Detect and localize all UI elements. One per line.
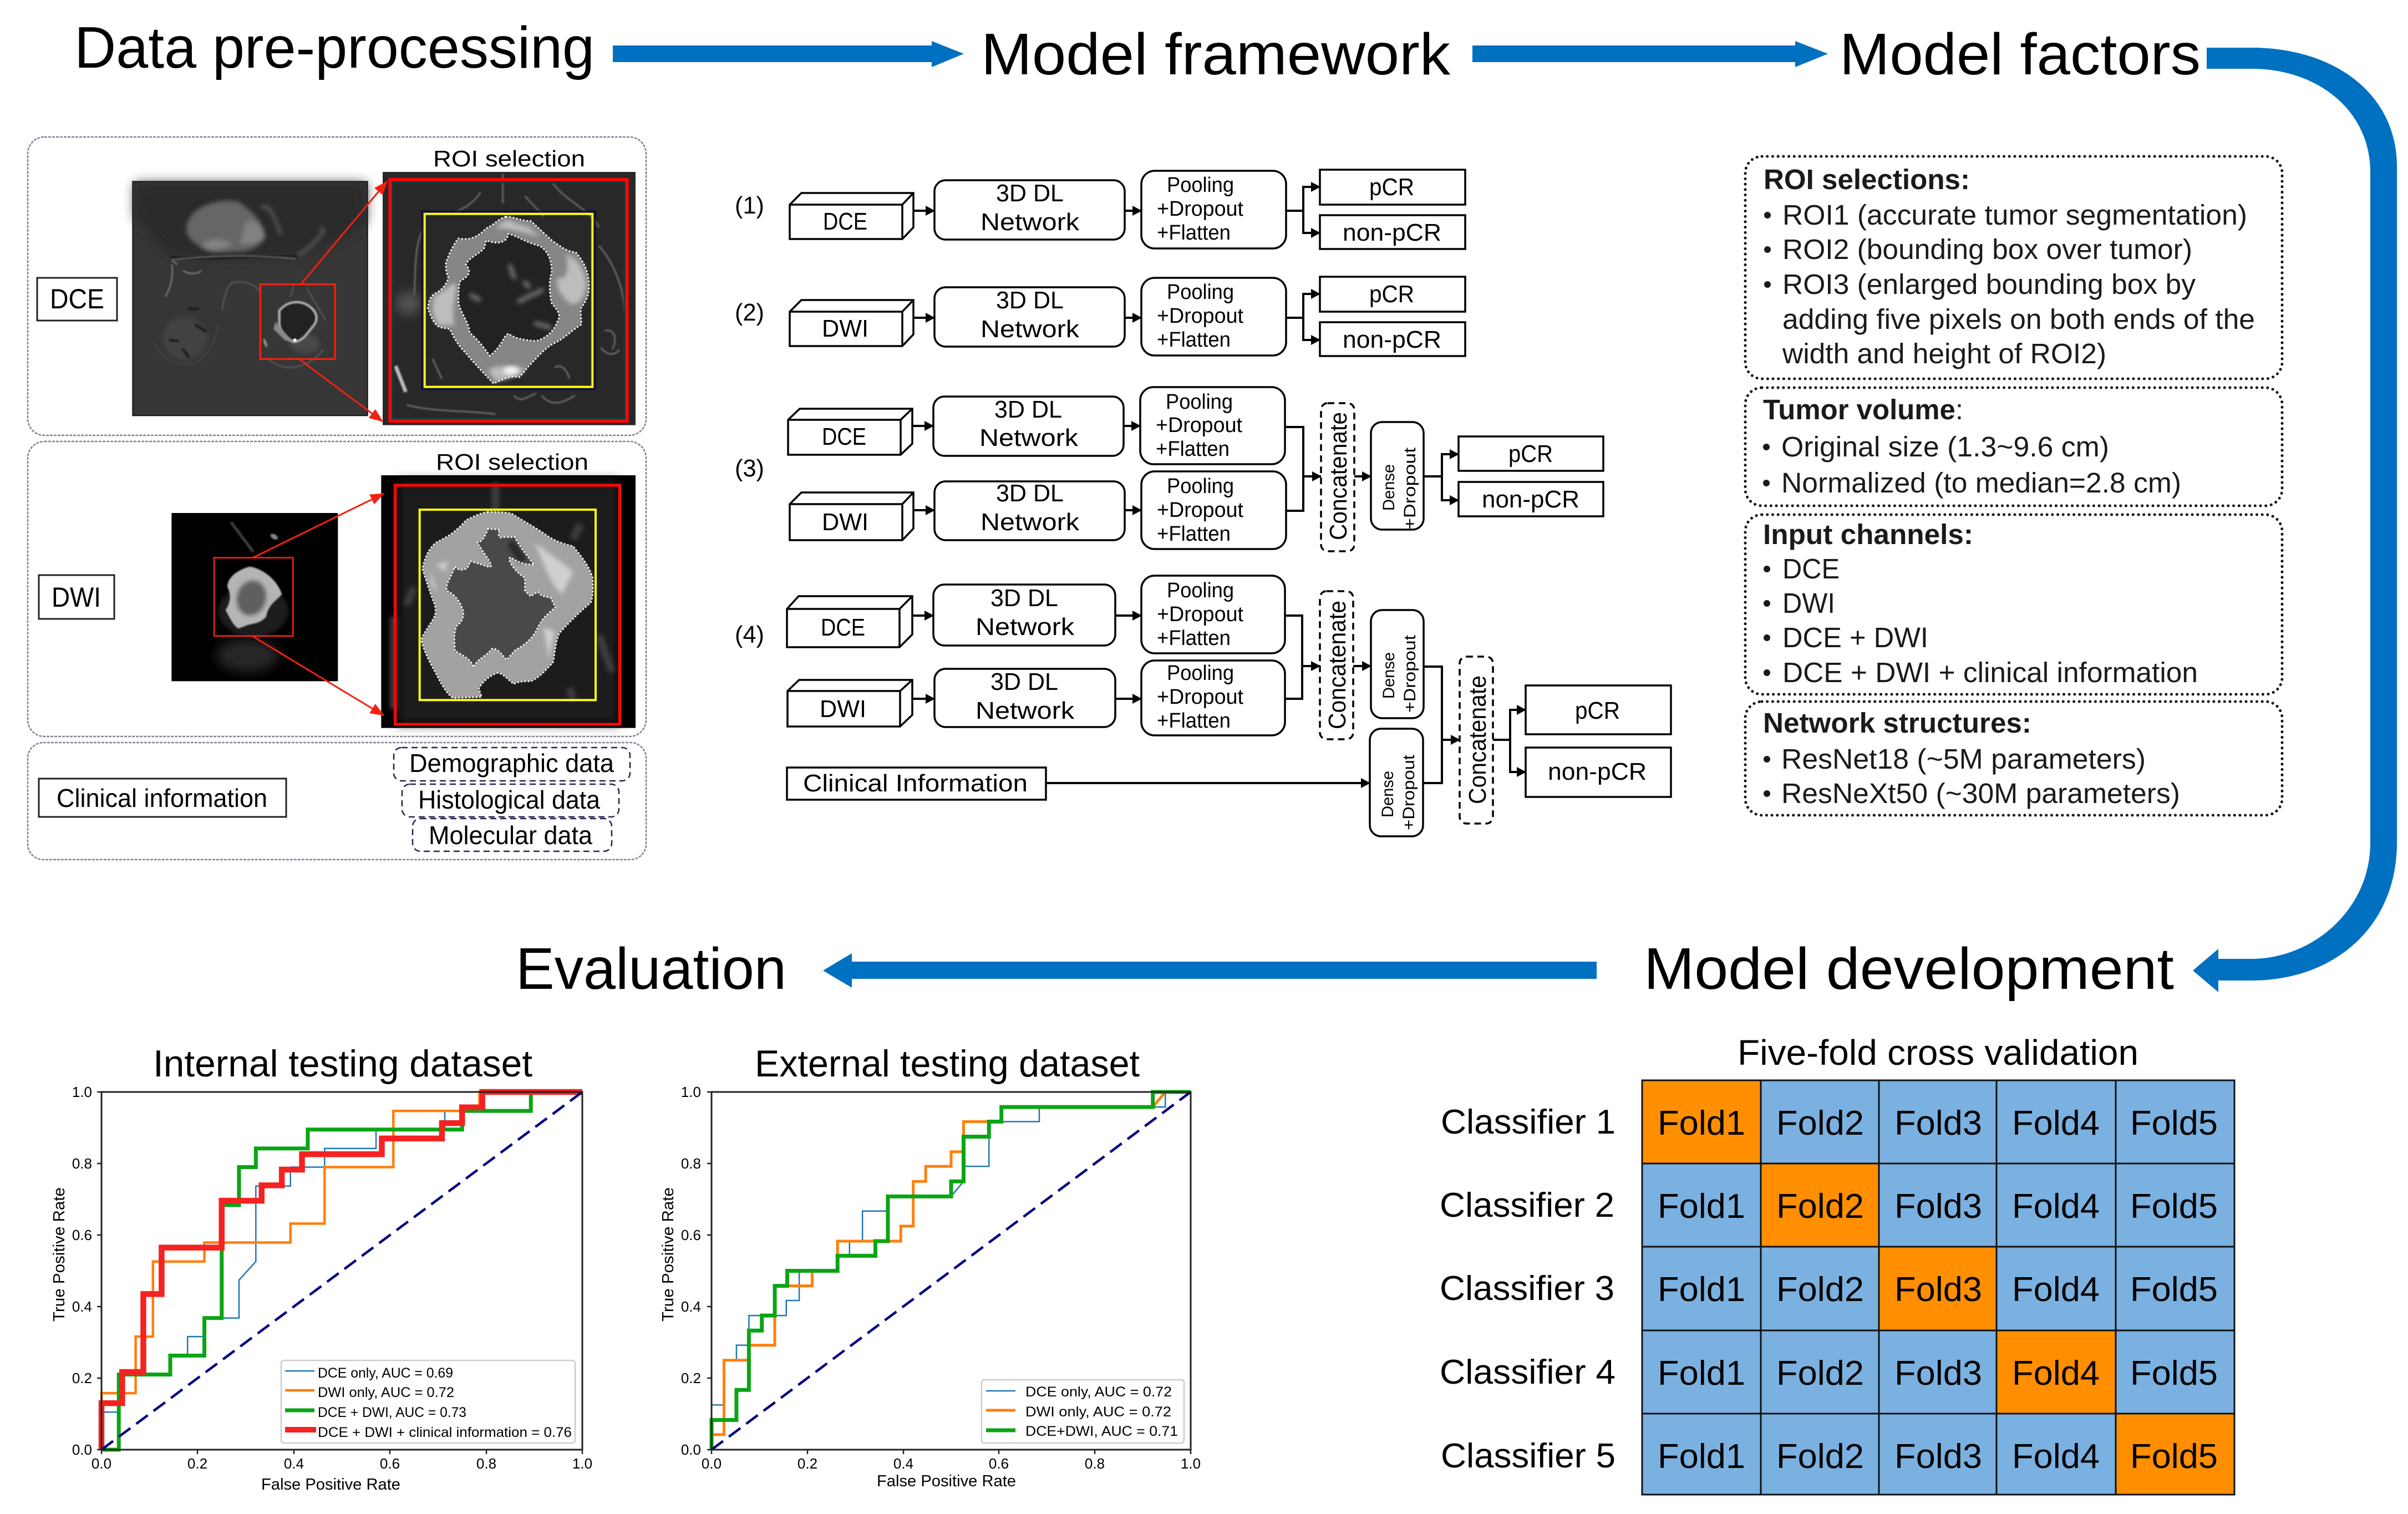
panel: network structures xyxy=(1745,702,2282,815)
external axes: 0.6 xyxy=(989,1455,1009,1472)
DWI label xyxy=(39,575,114,619)
framework row 3: +Dropout xyxy=(1156,414,1242,437)
external curves xyxy=(712,1092,1191,1450)
panel: input channels: DCE xyxy=(1782,553,1840,585)
internal axes: 0.2 xyxy=(72,1370,92,1386)
classifier 1 row xyxy=(1441,1080,2234,1164)
classifier 4 row: Fold3 xyxy=(1894,1354,1982,1393)
DWI enlarged ROI image xyxy=(381,475,636,728)
external axes: 0.4 xyxy=(681,1298,701,1315)
framework row 3: DWI xyxy=(822,509,868,536)
classifier 3 row: Fold4 xyxy=(2012,1271,2100,1309)
title: Model framework: Model framework xyxy=(981,22,1451,87)
framework row 4: 3D DL xyxy=(990,668,1058,695)
classifier 4 row: Fold2 xyxy=(1776,1354,1864,1393)
framework row 3 xyxy=(735,387,1603,551)
panel: input channels: DCE + DWI + clinical information xyxy=(1782,657,2198,688)
molecular data tag: Molecular data xyxy=(429,821,592,850)
external axes xyxy=(659,1084,1201,1490)
classifier 5 row: Fold2 xyxy=(1776,1437,1864,1476)
internal legend: DCE + DWI + clinical information = 0.76 xyxy=(318,1425,572,1440)
panel: tumor volume: Tumor volume: xyxy=(1763,394,1963,425)
framework row 2: (2) xyxy=(735,299,764,326)
framework row 1: Network xyxy=(981,209,1080,236)
panel: network structures: Network structures: xyxy=(1763,707,2031,739)
panel: ROI selections: ROI3 (enlarged bounding box by xyxy=(1782,268,2196,300)
classifier 3 row: Fold2 xyxy=(1776,1271,1864,1309)
panel: input channels: DCE + DWI xyxy=(1782,622,1928,653)
framework row 2: 3D DL xyxy=(996,287,1064,314)
panel: input channels: Input channels: xyxy=(1763,519,1973,550)
classifier 1 row: Classifier 1 xyxy=(1441,1103,1616,1141)
framework row 4: +Flatten xyxy=(1157,627,1231,650)
title: Model development: Model development xyxy=(1644,936,2174,1002)
classifier 5 row: Fold5 xyxy=(2130,1437,2218,1476)
framework row 4: pCR xyxy=(1575,697,1620,724)
panel: input channels: DWI xyxy=(1782,587,1835,619)
framework row 4: Pooling xyxy=(1167,662,1234,685)
framework row 4: non-pCR xyxy=(1548,758,1647,785)
classifier 3 row: Classifier 3 xyxy=(1440,1269,1614,1308)
classifier 2 row: Fold1 xyxy=(1658,1187,1745,1226)
DWI ROI selection heading: ROI selection xyxy=(436,449,588,475)
title: Data pre-processing: Data pre-processing xyxy=(74,15,595,80)
arrow: framework to factors xyxy=(1472,41,1828,67)
panel: ROI selections xyxy=(1745,156,2282,379)
panel: network structures: ResNeXt50 (~30M parameters) xyxy=(1781,778,2180,809)
panel: network structures: ResNet18 (~5M parameters) xyxy=(1781,743,2146,775)
framework diagram xyxy=(735,170,1671,836)
clinical information label: Clinical information xyxy=(57,784,267,812)
internal axes: 0.0 xyxy=(72,1441,92,1458)
internal axes: True Positive Rate xyxy=(50,1187,68,1322)
panel: DWI data xyxy=(28,441,646,736)
classifier 2 row: Fold2 xyxy=(1776,1187,1864,1226)
panel: ROI selections: adding five pixels on both ends of the xyxy=(1782,303,2255,335)
framework row 4: Pooling xyxy=(1167,579,1234,602)
classifier 5 row: Classifier 5 xyxy=(1441,1437,1616,1475)
classifier 2 row: Fold3 xyxy=(1894,1187,1982,1226)
framework row 1: non-pCR xyxy=(1343,219,1441,246)
framework row 3: +Dropout xyxy=(1401,447,1419,530)
framework row 2: DWI xyxy=(822,315,868,342)
panel: input channels xyxy=(1745,515,2282,694)
classifier 3 row: Fold1 xyxy=(1658,1271,1745,1309)
internal axes: 1.0 xyxy=(72,1084,92,1100)
framework row 4 xyxy=(735,576,1671,836)
framework row 4: +Dropout xyxy=(1401,634,1419,713)
framework row 1: (1) xyxy=(735,192,764,219)
framework row 3: 3D DL xyxy=(996,480,1064,507)
framework row 4: Concatenate xyxy=(1464,675,1491,804)
external axes: 0.4 xyxy=(893,1455,913,1472)
DCE label xyxy=(37,278,117,321)
framework row 4: (4) xyxy=(735,621,764,648)
classifier 2 row: Fold4 xyxy=(2012,1187,2100,1226)
table: five-fold classifiers xyxy=(1440,1080,2234,1495)
framework row 4: Network xyxy=(976,613,1075,641)
histological data tag: Histological data xyxy=(418,785,600,814)
framework row 3: Network xyxy=(981,509,1080,536)
internal axes xyxy=(50,1084,592,1493)
framework row 4: 3D DL xyxy=(990,585,1058,612)
heading: five-fold cross validation: Five-fold cross validation xyxy=(1738,1033,2138,1073)
framework row 1: DCE xyxy=(823,208,867,235)
panel: ROI selections: width and height of ROI2) xyxy=(1782,338,2106,369)
external legend: DCE only, AUC = 0.72 xyxy=(1025,1384,1172,1400)
panel: ROI selections: ROI selections: xyxy=(1764,164,1970,195)
external axes: True Positive Rate xyxy=(659,1187,677,1322)
framework row 1: pCR xyxy=(1369,174,1414,201)
framework row 4: Network xyxy=(976,697,1075,724)
DWI full MRI image xyxy=(171,513,338,681)
internal axes: 0.0 xyxy=(92,1455,111,1472)
classifier 4 row: Fold5 xyxy=(2130,1354,2218,1393)
DCE full MRI image xyxy=(133,181,368,415)
demographic data tag: Demographic data xyxy=(409,749,614,778)
external axes: 0.0 xyxy=(681,1441,701,1458)
classifier 3 row: Fold3 xyxy=(1894,1271,1982,1309)
framework row 2: Pooling xyxy=(1167,281,1234,304)
framework row 4: +Dropout xyxy=(1157,603,1243,626)
internal legend: DCE + DWI, AUC = 0.73 xyxy=(318,1405,466,1420)
classifier 2 row: Fold5 xyxy=(2130,1187,2218,1226)
DCE enlarged ROI image xyxy=(383,172,636,425)
classifier 5 row: Fold1 xyxy=(1658,1437,1745,1476)
classifier 2 row: Classifier 2 xyxy=(1440,1186,1614,1225)
classifier 1 row: Fold4 xyxy=(2012,1104,2100,1142)
arrow: pre-processing to framework xyxy=(613,41,964,67)
internal axes: 0.4 xyxy=(284,1455,304,1472)
external axes: 0.8 xyxy=(681,1155,701,1172)
internal axes: 0.8 xyxy=(476,1455,496,1472)
DCE ROI selection heading: ROI selection xyxy=(433,146,585,171)
panel: ROI selections: ROI2 (bounding box over tumor) xyxy=(1782,233,2192,265)
DCE label: DCE xyxy=(50,283,104,314)
chart: internal testing dataset ROC xyxy=(50,1043,592,1493)
external legend: DWI only, AUC = 0.72 xyxy=(1025,1404,1171,1420)
framework row 4: Dense xyxy=(1379,771,1397,817)
framework row 3: pCR xyxy=(1508,440,1553,468)
framework row 3: Dense xyxy=(1380,464,1398,511)
title: Model factors: Model factors xyxy=(1840,22,2201,87)
framework row 4: DWI xyxy=(820,695,866,723)
framework row 3: +Dropout xyxy=(1157,499,1243,522)
classifier 1 row: Fold3 xyxy=(1894,1104,1982,1142)
framework row 3: Pooling xyxy=(1166,390,1233,414)
classifier 1 row: Fold2 xyxy=(1776,1104,1864,1142)
external axes: 0.2 xyxy=(797,1455,817,1472)
external legend: DCE+DWI, AUC = 0.71 xyxy=(1025,1424,1178,1439)
framework row 2: pCR xyxy=(1369,281,1414,308)
framework row 3: +Flatten xyxy=(1157,522,1231,546)
classifier 3 row: Fold5 xyxy=(2130,1271,2218,1309)
framework row 2 xyxy=(735,277,1465,356)
panel: ROI selections: ROI1 (accurate tumor segmentation) xyxy=(1782,199,2247,231)
external axes: 0.6 xyxy=(681,1227,701,1243)
panel: tumor volume: Normalized (to median=2.8 cm) xyxy=(1781,467,2181,499)
framework row 4: Clinical Information xyxy=(803,770,1028,797)
framework row 3: Pooling xyxy=(1167,475,1234,498)
chart: external testing dataset ROC: External testing dataset xyxy=(755,1043,1140,1085)
framework row 3: 3D DL xyxy=(994,396,1062,423)
framework row 4: +Dropout xyxy=(1400,754,1418,830)
framework row 3: DCE xyxy=(822,423,866,450)
external axes: False Positive Rate xyxy=(877,1472,1016,1490)
internal axes: 0.6 xyxy=(380,1455,400,1472)
DWI zoom arrows xyxy=(252,494,384,715)
classifier 4 row: Fold1 xyxy=(1658,1354,1745,1393)
framework row 3: Concatenate xyxy=(1325,412,1352,540)
external axes: 0.0 xyxy=(702,1455,722,1472)
classifier 4 row xyxy=(1440,1330,2234,1414)
framework row 4: DCE xyxy=(821,614,865,641)
framework row 2: non-pCR xyxy=(1343,326,1441,353)
classifier 1 row: Fold1 xyxy=(1658,1104,1745,1142)
classifier 1 row: Fold5 xyxy=(2130,1104,2218,1142)
classifier 5 row xyxy=(1441,1414,2234,1495)
internal axes: False Positive Rate xyxy=(261,1476,400,1493)
chart: external testing dataset ROC xyxy=(659,1043,1201,1490)
internal curves xyxy=(101,1092,582,1450)
panel: tumor volume: Original size (1.3~9.6 cm) xyxy=(1781,431,2109,463)
framework row 3: (3) xyxy=(735,455,764,482)
framework row 2: +Flatten xyxy=(1157,328,1231,352)
framework row 3: +Flatten xyxy=(1156,438,1230,461)
internal legend: DCE only, AUC = 0.69 xyxy=(318,1365,453,1381)
DWI label: DWI xyxy=(52,582,101,613)
framework row 3: non-pCR xyxy=(1482,486,1579,513)
framework row 1: 3D DL xyxy=(996,180,1064,207)
classifier 5 row: Fold4 xyxy=(2012,1437,2100,1476)
internal axes: 0.8 xyxy=(72,1155,92,1172)
external legend xyxy=(982,1380,1184,1443)
framework row 1: +Dropout xyxy=(1157,197,1243,221)
internal axes: 0.2 xyxy=(187,1455,207,1472)
framework row 2: +Dropout xyxy=(1157,304,1243,328)
panel: DCE data xyxy=(28,137,646,435)
internal axes: 1.0 xyxy=(572,1455,592,1472)
DCE zoom arrows xyxy=(299,181,387,421)
clinical information label xyxy=(39,779,286,817)
chart: internal testing dataset ROC: Internal testing dataset xyxy=(153,1043,532,1085)
external axes: 1.0 xyxy=(1181,1455,1201,1472)
title: Evaluation: Evaluation xyxy=(516,936,786,1002)
internal legend: DWI only, AUC = 0.72 xyxy=(318,1385,454,1400)
classifier 4 row: Classifier 4 xyxy=(1440,1353,1616,1391)
internal axes: 0.6 xyxy=(72,1227,92,1243)
framework row 1: +Flatten xyxy=(1157,221,1231,245)
panel: tumor volume xyxy=(1745,388,2282,506)
classifier 3 row xyxy=(1440,1247,2234,1330)
framework row 1: Pooling xyxy=(1167,174,1234,197)
classifier 5 row: Fold3 xyxy=(1894,1437,1982,1476)
classifier 2 row xyxy=(1440,1164,2234,1247)
framework row 4: +Flatten xyxy=(1157,709,1231,733)
framework row 4: +Dropout xyxy=(1157,685,1243,709)
classifier 4 row: Fold4 xyxy=(2012,1354,2100,1393)
framework row 2: Network xyxy=(981,316,1080,343)
framework row 1 xyxy=(735,170,1465,249)
framework row 4: Concatenate xyxy=(1324,601,1351,729)
framework row 3: Network xyxy=(979,424,1079,451)
internal legend xyxy=(281,1360,575,1443)
external axes: 0.2 xyxy=(681,1370,701,1386)
internal axes: 0.4 xyxy=(72,1298,92,1315)
arrow: factors curving down to model development xyxy=(2193,48,2397,992)
external axes: 1.0 xyxy=(681,1084,701,1100)
framework row 4: Dense xyxy=(1380,652,1398,699)
arrow: development to evaluation xyxy=(823,953,1597,988)
panel: clinical information xyxy=(28,743,646,860)
external axes: 0.8 xyxy=(1085,1455,1105,1472)
